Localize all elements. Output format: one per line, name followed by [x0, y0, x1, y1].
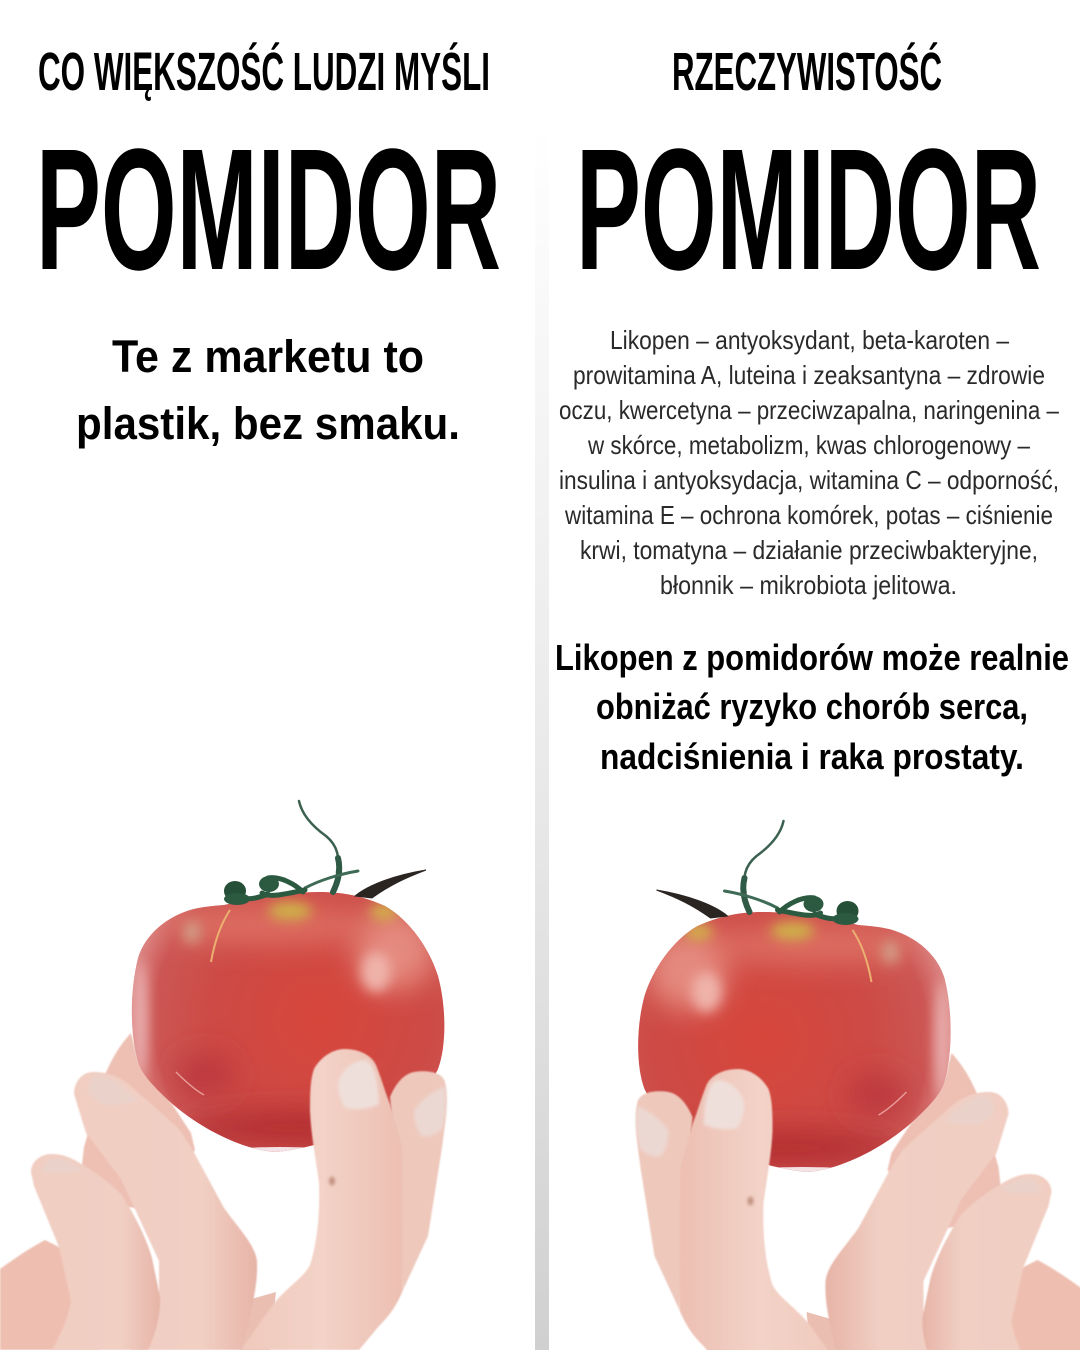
thumb — [241, 1049, 403, 1350]
illustration: hand holding tomato left — [0, 801, 447, 1350]
text block: market tomato claim — [76, 331, 460, 449]
right column — [555, 42, 1080, 1350]
palm — [0, 1240, 100, 1350]
stem and sepals — [224, 801, 426, 905]
nails — [41, 1060, 446, 1186]
text block: market tomato claim: Te z marketu to — [112, 331, 424, 382]
title: POMIDOR left: POMIDOR — [36, 112, 501, 306]
text block: nutrient list: Likopen – antyoksydant, beta-karoten – — [610, 325, 1009, 355]
tomato — [132, 892, 444, 1155]
left column — [0, 42, 501, 1350]
ring finger — [390, 1071, 447, 1290]
text block: lycopene benefit — [555, 637, 1069, 777]
small fold finger — [240, 1292, 276, 1350]
text block: market tomato claim: plastik, bez smaku. — [76, 398, 460, 449]
text block: nutrient list — [559, 325, 1059, 600]
text block: nutrient list: błonnik – mikrobiota jelitowa. — [660, 570, 957, 600]
index finger — [74, 1072, 257, 1350]
divider between columns — [535, 0, 549, 1350]
illustration: hand holding tomato right — [636, 821, 1080, 1350]
heading: what most people think: CO WIĘKSZOŚĆ LUDZI MYŚLI — [38, 42, 490, 102]
lower finger — [31, 1154, 160, 1350]
back finger — [78, 1033, 195, 1210]
text block: lycopene benefit: nadciśnienia i raka prostaty. — [600, 736, 1024, 777]
